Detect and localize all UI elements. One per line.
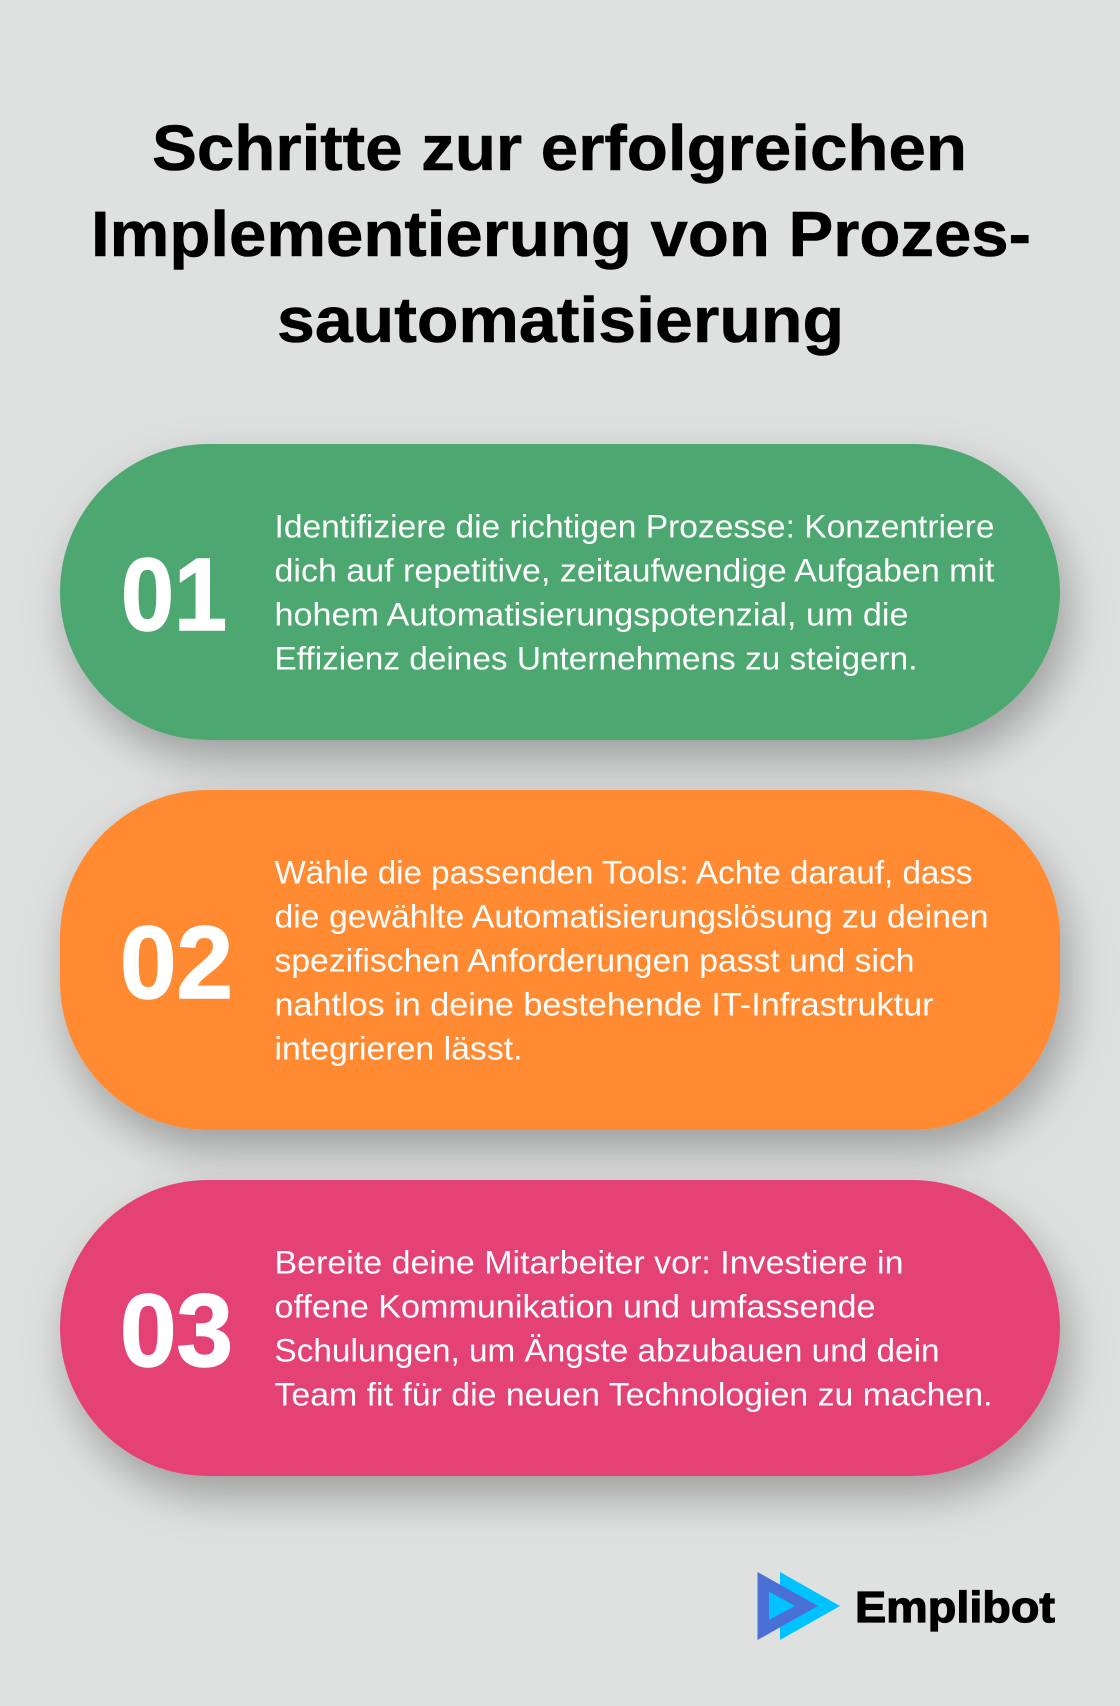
- number 03: 03: [120, 1273, 233, 1388]
- step 01 description: [274, 508, 995, 676]
- step 01 description: Effizienz deines Unternehmens zu steigern.: [274, 640, 918, 676]
- panel: step 02: [60, 790, 1060, 1130]
- step 02 description: die gewählte Automatisierungslösung zu deinen: [274, 898, 988, 934]
- step 03 description: Team fit für die neuen Technologien zu machen.: [274, 1376, 992, 1412]
- title: Implementierung von Prozes-: [91, 198, 1031, 270]
- panel: step 03: [60, 1180, 1060, 1476]
- number 01: 01: [121, 537, 227, 652]
- pill background green: [60, 444, 1060, 740]
- step 01 description: Identifiziere die richtigen Prozesse: Konzentriere: [274, 508, 995, 544]
- step 02 description: nahtlos in deine bestehende IT-Infrastruktur: [274, 986, 934, 1022]
- logo: Emplibot: [758, 1572, 1055, 1640]
- step 03 description: Schulungen, um Ängste abzubauen und dein: [274, 1332, 940, 1368]
- step 02 description: integrieren lässt.: [274, 1030, 522, 1066]
- pill background orange: [60, 790, 1060, 1130]
- icon: play triangles: [758, 1572, 840, 1640]
- pill background pink: [60, 1180, 1060, 1476]
- step 02 description: [274, 854, 988, 1066]
- title: Schritte zur erfolgreichen: [152, 112, 967, 184]
- step 02 description: Wähle die passenden Tools: Achte darauf, dass: [274, 854, 973, 890]
- step 03 description: offene Kommunikation und umfassende: [274, 1288, 876, 1324]
- panel: step 01: [60, 444, 1060, 740]
- title: [91, 112, 1031, 356]
- step 02 description: spezifischen Anforderungen passt und sich: [274, 942, 914, 978]
- step 01 description: dich auf repetitive, zeitaufwendige Aufgaben mit: [274, 552, 994, 588]
- number 02: 02: [120, 905, 233, 1020]
- step 03 description: Bereite deine Mitarbeiter vor: Investiere in: [274, 1244, 904, 1280]
- step 03 description: [274, 1244, 992, 1412]
- step 01 description: hohem Automatisierungspotenzial, um die: [274, 596, 908, 632]
- logo wordmark: Emplibot: [855, 1583, 1055, 1632]
- title: sautomatisierung: [277, 284, 844, 356]
